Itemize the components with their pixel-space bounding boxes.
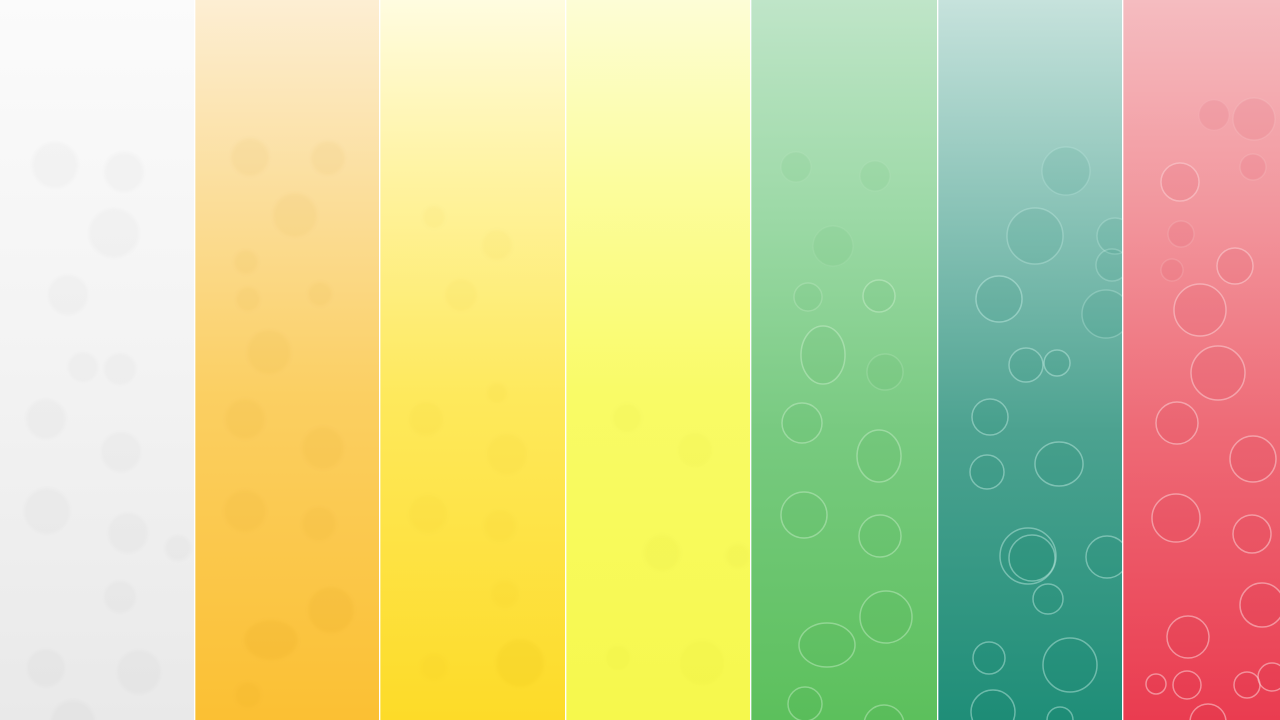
band dividers xyxy=(194,0,1124,720)
band 4: lemon xyxy=(566,0,750,720)
band 3: yellow xyxy=(380,0,565,720)
band 6: teal xyxy=(938,0,1133,720)
band 5: green xyxy=(751,0,937,720)
band 2: orange xyxy=(195,0,379,720)
band 7: red xyxy=(1123,0,1280,720)
band 1: white-grey xyxy=(0,0,194,720)
